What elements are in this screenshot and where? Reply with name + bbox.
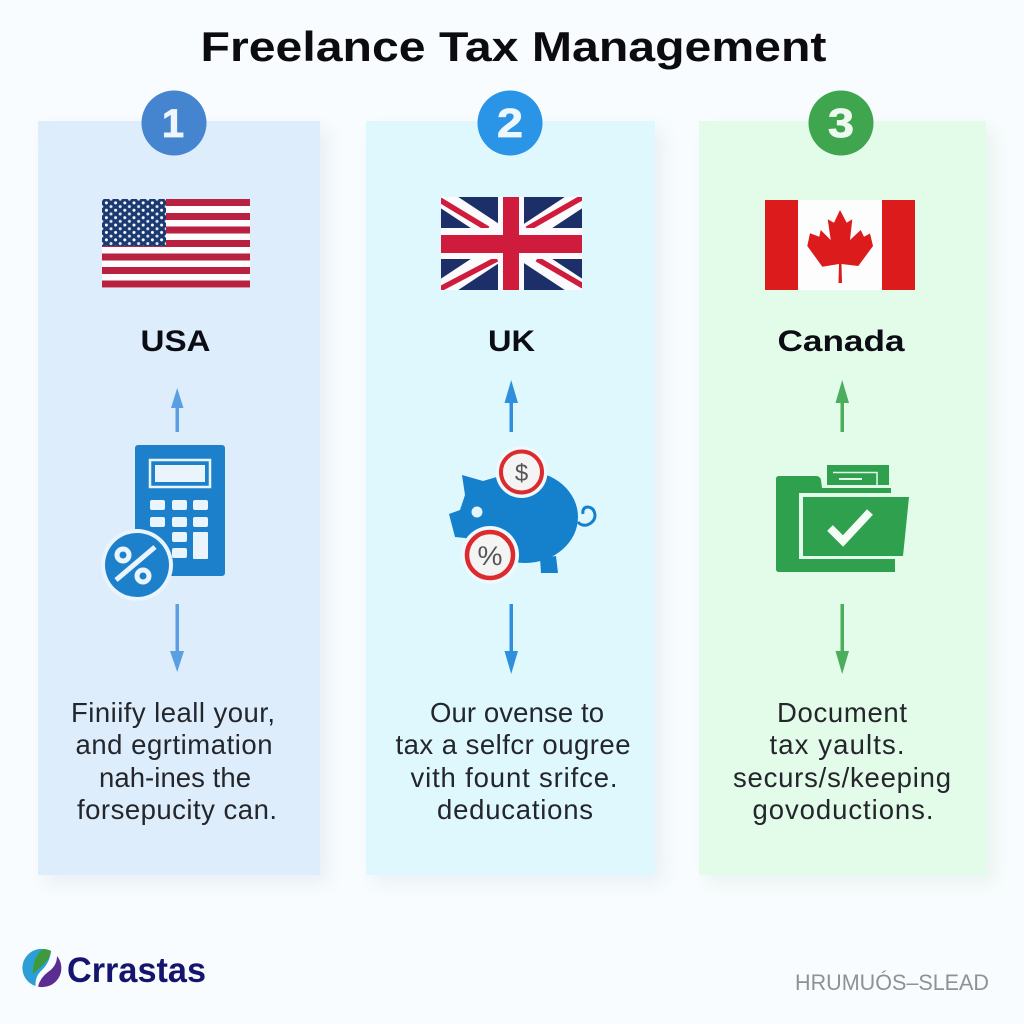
number badge 1: 1 [162, 102, 184, 146]
description: UK: deducations [437, 794, 593, 825]
description: UK: Our ovense to [430, 697, 604, 728]
icon: USA flag [102, 199, 250, 288]
number badge 3 [808, 90, 874, 156]
description: UK: vith fount srifce. [410, 762, 618, 793]
coin: percent [461, 526, 519, 584]
description: UK: tax a selfcr ougree [396, 729, 630, 760]
arrow down [170, 604, 184, 672]
logo mark [22, 949, 61, 987]
arrow up [836, 380, 849, 432]
coin: percent: % [478, 541, 502, 571]
footer label: HRUMUÓS–SLEAD [795, 970, 989, 995]
panel: Canada [699, 90, 994, 883]
number badge 3: 3 [828, 100, 854, 146]
panel: UK [366, 90, 663, 883]
number badge 1 [142, 90, 206, 156]
description: Canada: securs/s/keeping [733, 762, 951, 793]
country label: UK: UK [488, 325, 535, 358]
number badge 2 [478, 90, 542, 156]
description: USA [71, 697, 277, 825]
icon: Canada flag [765, 200, 915, 290]
number badge 2: 2 [497, 100, 523, 146]
description: Canada: govoductions. [752, 794, 934, 825]
description: USA: and egrtimation [76, 729, 272, 760]
icon: folder with check [776, 465, 909, 572]
description: Canada: tax yaults. [770, 729, 904, 760]
title: Freelance Tax Management [200, 23, 827, 70]
icon: calculator with percent badge [101, 445, 225, 601]
icon: piggy bank with coins [449, 446, 595, 584]
panel: USA [38, 90, 328, 883]
description: USA: Finiify leall your, [71, 697, 275, 728]
arrow up [171, 388, 184, 432]
coin: dollar [496, 446, 548, 498]
logo: Crrastas [22, 949, 206, 990]
icon: UK flag [440, 197, 583, 290]
description: Canada [733, 697, 951, 825]
description: UK [396, 697, 630, 825]
country label: USA: USA [140, 325, 210, 358]
logo wordmark: Crrastas [67, 951, 206, 990]
description: USA: forsepucity can. [77, 794, 277, 825]
country label: Canada: Canada [778, 325, 905, 358]
arrow down [504, 604, 518, 674]
arrow down [836, 604, 849, 674]
description: USA: nah-ines the [99, 762, 251, 793]
arrow up [504, 380, 518, 432]
coin: dollar: $ [515, 460, 528, 487]
description: Canada: Document [777, 697, 907, 728]
